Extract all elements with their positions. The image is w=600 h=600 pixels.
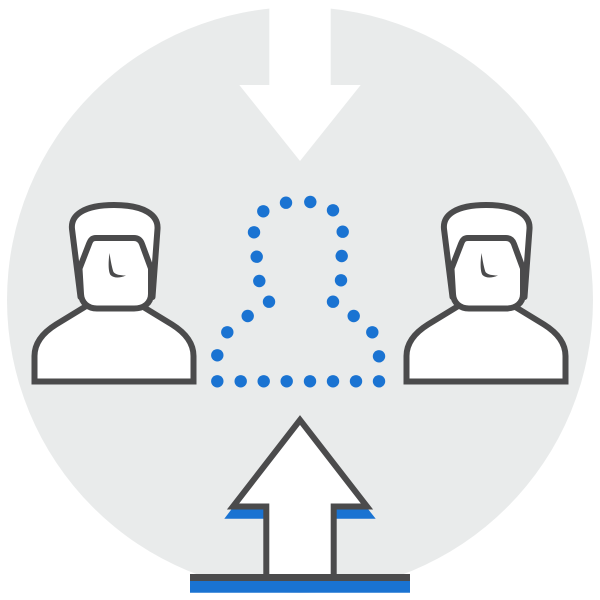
arrow: white down arrow bbox=[239, 0, 361, 161]
right person face bbox=[452, 238, 523, 308]
left person face bbox=[80, 238, 151, 308]
right person body bbox=[406, 305, 566, 382]
person: left bbox=[34, 205, 194, 382]
dotted person outline bbox=[211, 196, 385, 387]
arrow body bbox=[233, 420, 367, 577]
left person nose bbox=[109, 253, 126, 278]
person: right bbox=[406, 205, 566, 382]
right person hair bbox=[444, 205, 530, 297]
arrow: outlined up arrow with blue shadow bbox=[190, 420, 410, 593]
right person nose bbox=[481, 253, 498, 278]
base bar bbox=[190, 574, 410, 581]
arrow shadow wings bbox=[224, 509, 376, 519]
left person body bbox=[34, 305, 194, 382]
left person hair bbox=[72, 205, 158, 297]
base bar shadow bbox=[190, 581, 410, 593]
